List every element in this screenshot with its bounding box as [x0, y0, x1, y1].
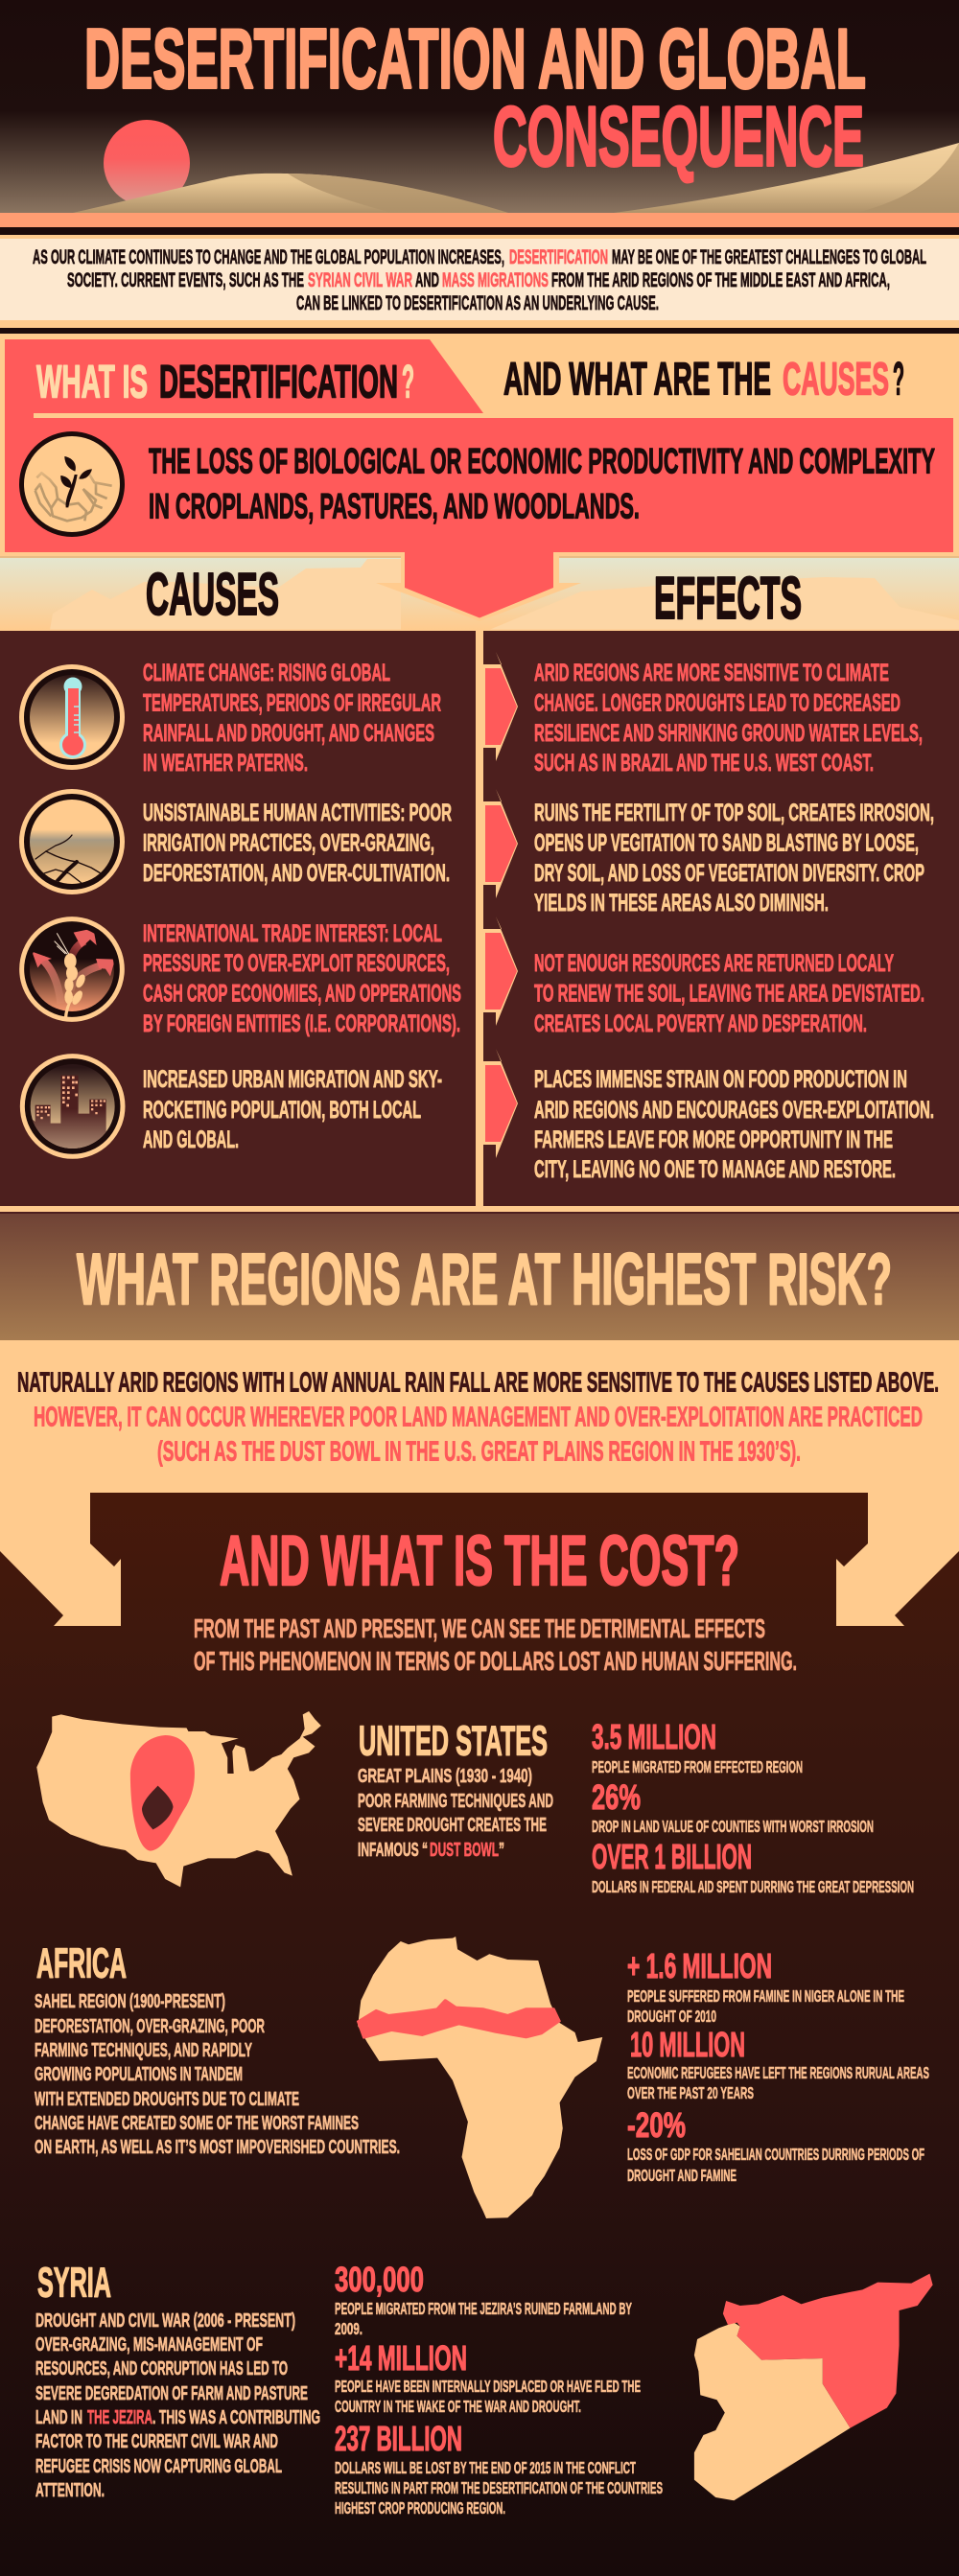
syria description: ATTENTION.: [35, 2480, 105, 2501]
cause: urban migration: INCREASED URBAN MIGRATION AND SKY-: [143, 1066, 442, 1093]
arrow: human activities effect: [483, 789, 518, 898]
panel: causes and effects headings: [0, 548, 959, 632]
arrow: down to causes and effects: [376, 548, 581, 621]
syria statistics: +14 MILLION: [335, 2338, 467, 2378]
syria description: DROUGHT AND CIVIL WAR (2006 - PRESENT): [35, 2310, 295, 2332]
map: united states: [36, 1711, 321, 1887]
panel: introduction: [0, 239, 959, 334]
us statistics: 3.5 MILLION: [592, 1717, 716, 1756]
syria statistics: 2009.: [335, 2319, 363, 2338]
cause: international trade: CASH CROP ECONOMIES, AND OPPERATIONS: [143, 980, 461, 1007]
effect: food production strain: [534, 1066, 934, 1183]
definition text: [149, 441, 935, 525]
heading: causes: CAUSES: [146, 562, 279, 628]
definition text: IN CROPLANDS, PASTURES, AND WOODLANDS.: [149, 487, 640, 525]
africa description: [35, 1991, 400, 2158]
syria description: . THIS WAS A CONTRIBUTING: [152, 2407, 320, 2428]
africa description: SAHEL REGION (1900-PRESENT): [35, 1991, 225, 2012]
cause: international trade: INTERNATIONAL TRADE INTEREST: LOCAL: [143, 920, 442, 947]
cost intro text: [194, 1613, 797, 1676]
us description: GREAT PLAINS (1930 - 1940): [358, 1766, 532, 1787]
heading: what is desertification: [36, 357, 414, 408]
us description: POOR FARMING TECHNIQUES AND: [358, 1791, 553, 1812]
heading: united states: UNITED STATES: [359, 1718, 548, 1764]
heading: effects: EFFECTS: [654, 566, 802, 632]
panel: syria: [35, 2260, 933, 2518]
panel: introduction: SYRIAN CIVIL WAR: [308, 268, 412, 291]
cause: climate change: IN WEATHER PATERNS.: [143, 750, 308, 777]
africa description: GROWING POPULATIONS IN TANDEM: [35, 2064, 243, 2085]
heading: and what are the causes: AND WHAT ARE THE: [503, 355, 771, 405]
us statistics: [592, 1717, 914, 1896]
africa statistics: [627, 1946, 929, 2185]
cause: unsustainable human activities: UNSISTAINABLE HUMAN ACTIVITIES: POOR: [143, 800, 452, 826]
heading: what is desertification: WHAT IS: [36, 357, 148, 408]
syria statistics: DOLLARS WILL BE LOST BY THE END OF 2015 IN THE CONFLICT: [335, 2458, 636, 2477]
syria description: REFUGEE CRISIS NOW CAPTURING GLOBAL: [35, 2456, 282, 2477]
syria statistics: 300,000: [335, 2260, 424, 2299]
heading: africa: AFRICA: [36, 1940, 127, 1986]
us description: DUST BOWL: [430, 1840, 499, 1861]
syria statistics: COUNTRY IN THE WAKE OF THE WAR AND DROUGHT.: [335, 2397, 581, 2416]
heading: what is desertification: DESERTIFICATION: [159, 357, 398, 408]
us description: ”: [499, 1840, 504, 1861]
us statistics: OVER 1 BILLION: [592, 1837, 752, 1876]
syria description: LAND IN: [35, 2407, 82, 2428]
africa statistics: + 1.6 MILLION: [627, 1946, 772, 1985]
syria statistics: PEOPLE HAVE BEEN INTERNALLY DISPLACED OR HAVE FLED THE: [335, 2377, 641, 2396]
syria statistics: HIGHEST CROP PRODUCING REGION.: [335, 2498, 505, 2518]
panel: africa: [35, 1937, 929, 2218]
syria statistics: [335, 2260, 663, 2518]
header base bands: [0, 213, 959, 239]
effect: resources not returned: [534, 950, 924, 1037]
panel: introduction: MASS MIGRATIONS: [442, 268, 549, 291]
syria statistics: PEOPLE MIGRATED FROM THE JEZIRA’S RUINED FARMLAND BY: [335, 2299, 632, 2318]
africa description: CHANGE HAVE CREATED SOME OF THE WORST FAMINES: [35, 2113, 359, 2134]
syria description: RESOURCES, AND CORRUPTION HAS LED TO: [35, 2358, 288, 2379]
icon: sprout on cracked earth: [21, 433, 123, 535]
icon: cracked land: [21, 792, 123, 892]
arrow: right down: [836, 1340, 959, 1626]
africa statistics: -20%: [627, 2105, 686, 2145]
africa description: FARMING TECHNIQUES, AND RAPIDLY: [35, 2040, 252, 2061]
panel: cost section background: [0, 1493, 959, 2576]
panel: definition: ?: [402, 357, 414, 408]
panel: definition: [0, 334, 959, 558]
us description: INFAMOUS “: [358, 1840, 428, 1861]
cause: unsustainable human activities: [143, 800, 452, 887]
cause: climate change: RAINFALL AND DROUGHT, AND CHANGES: [143, 720, 434, 747]
icon: setting sun: [104, 120, 190, 206]
us description: SEVERE DROUGHT CREATES THE: [358, 1815, 547, 1836]
effect: soil fertility: [534, 800, 934, 917]
cause: climate change: [143, 660, 441, 777]
dunes: [73, 143, 959, 213]
africa statistics: 10 MILLION: [630, 2025, 745, 2064]
syria description: FACTOR TO THE CURRENT CIVIL WAR AND: [35, 2431, 278, 2452]
africa description: WITH EXTENDED DROUGHTS DUE TO CLIMATE: [35, 2089, 299, 2110]
panel: header scene: [0, 0, 959, 213]
panel: introduction: SOCIETY. CURRENT EVENTS, SUCH AS THE: [67, 268, 304, 291]
cause: unsustainable human activities: DEFORESTATION, AND OVER-CULTIVATION.: [143, 860, 450, 887]
cause: unsustainable human activities: IRRIGATION PRACTICES, OVER-GRAZING,: [143, 830, 434, 857]
cause: international trade: BY FOREIGN ENTITIES (I.E. CORPORATIONS).: [143, 1010, 460, 1037]
risk text: [17, 1367, 939, 1467]
panel: introduction: CAN BE LINKED TO DESERTIFICATION AS AN UNDERLYING CAUSE.: [296, 291, 659, 314]
icon: wheat and export arrows: [22, 919, 122, 1019]
arrow: urban migration effect: [483, 1049, 518, 1158]
heading: syria: SYRIA: [37, 2261, 111, 2307]
arrow: trade effect: [483, 917, 518, 1026]
effect: climate sensitivity: [534, 660, 923, 777]
syria description: THE JEZIRA: [87, 2407, 152, 2428]
africa statistics: OVER THE PAST 20 YEARS: [627, 2083, 754, 2102]
africa statistics: DROUGHT AND FAMINE: [627, 2166, 737, 2185]
cause: urban migration: AND GLOBAL.: [143, 1126, 239, 1153]
map: syria: [694, 2274, 933, 2500]
arrow: left down: [0, 1340, 121, 1626]
cause: international trade: PRESSURE TO OVER-EXPLOIT RESOURCES,: [143, 950, 450, 977]
cause: international trade: [143, 920, 461, 1037]
title: [84, 12, 866, 184]
africa description: DEFORESTATION, OVER-GRAZING, POOR: [35, 2016, 265, 2037]
syria description: SEVERE DEGREDATION OF FARM AND PASTURE: [35, 2383, 308, 2404]
cause: climate change: TEMPERATURES, PERIODS OF IRREGULAR: [143, 690, 441, 717]
africa statistics: DROUGHT OF 2010: [627, 2007, 716, 2026]
arrow: climate change effect: [483, 652, 518, 761]
panel: causes and effects: [0, 629, 959, 1212]
syria description: OVER-GRAZING, MIS-MANAGEMENT OF: [35, 2334, 263, 2356]
us description: [358, 1766, 553, 1861]
map: africa: [358, 1937, 602, 2218]
syria statistics: 237 BILLION: [335, 2419, 462, 2458]
panel: united states: [36, 1711, 914, 1896]
cause: urban migration: ROCKETING POPULATION, BOTH LOCAL: [143, 1097, 421, 1124]
panel: introduction: DESERTIFICATION: [509, 245, 608, 268]
panel: introduction: AS OUR CLIMATE CONTINUES TO CHANGE AND THE GLOBAL POPULATION INCREASES,: [33, 245, 504, 268]
panel: highest risk regions: [0, 1212, 959, 1561]
us statistics: 26%: [592, 1777, 641, 1817]
syria statistics: RESULTING IN PART FROM THE DESERTIFICATION OF THE COUNTRIES: [335, 2478, 663, 2497]
africa description: ON EARTH, AS WELL AS IT’S MOST IMPOVERISHED COUNTRIES.: [35, 2137, 400, 2158]
syria description: [35, 2310, 320, 2501]
icon: thermometer: [21, 667, 123, 767]
cause: climate change: CLIMATE CHANGE: RISING GLOBAL: [143, 660, 390, 686]
cause: urban migration: [143, 1066, 442, 1153]
icon: city skyline: [22, 1056, 123, 1160]
panel: definition: ?: [893, 355, 904, 405]
panel: introduction: AND: [415, 268, 439, 291]
